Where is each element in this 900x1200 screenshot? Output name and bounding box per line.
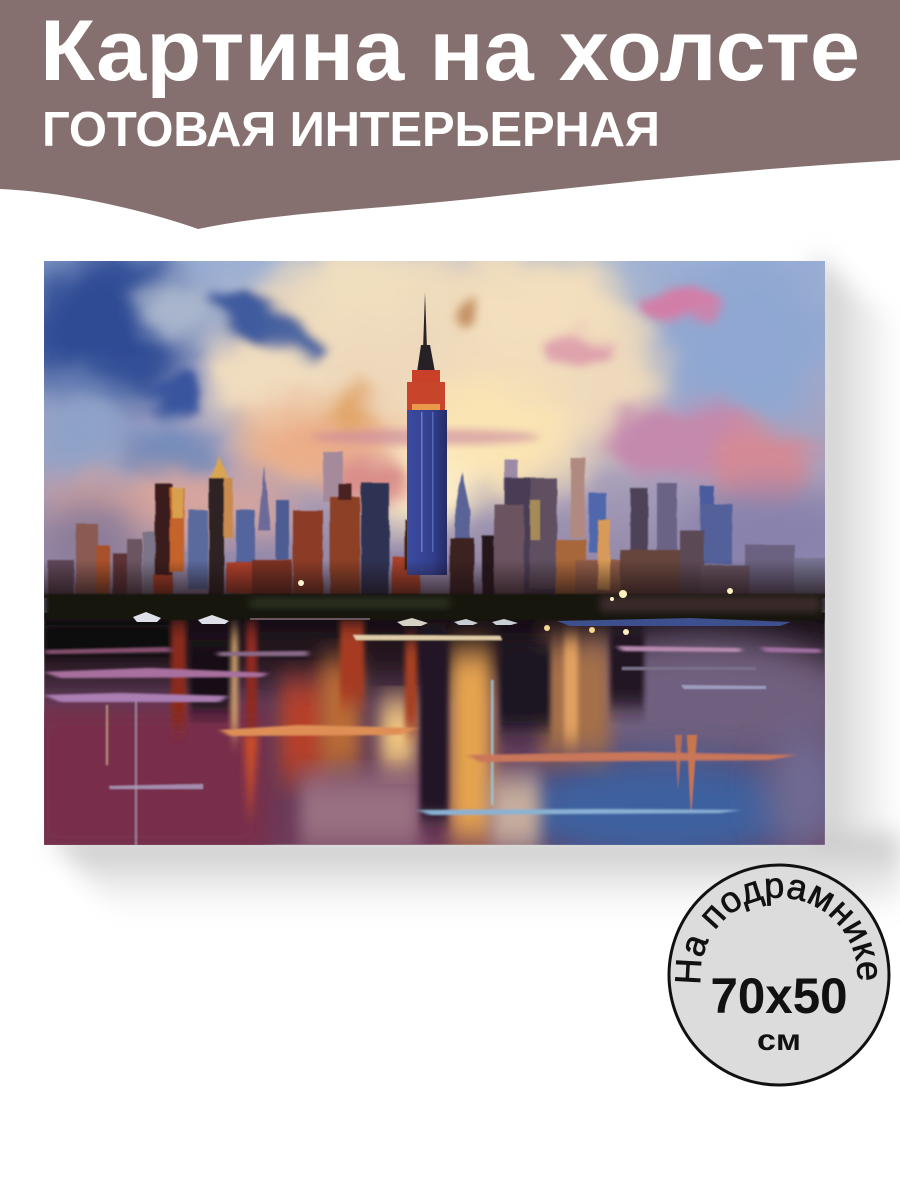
header banner — [0, 0, 900, 229]
title: Картина на холсте — [40, 3, 860, 99]
badge curved label: На подрамнике — [674, 878, 878, 982]
badge size number: 70x50 — [710, 968, 848, 1024]
Empire State tower — [407, 292, 447, 575]
far buildings — [48, 452, 825, 608]
painting: city skyline at sunset — [44, 261, 825, 845]
badge: canvas size — [668, 864, 890, 1086]
sky — [44, 261, 825, 611]
canvas drop shadow — [50, 255, 900, 930]
boats and lights — [133, 580, 733, 635]
subtitle: ГОТОВАЯ ИНТЕРЬЕРНАЯ — [42, 103, 660, 157]
main skyline — [76, 456, 750, 605]
water — [44, 611, 825, 845]
skyline base darkening — [44, 560, 825, 598]
badge unit: см — [757, 1024, 801, 1057]
shoreline — [44, 594, 825, 626]
